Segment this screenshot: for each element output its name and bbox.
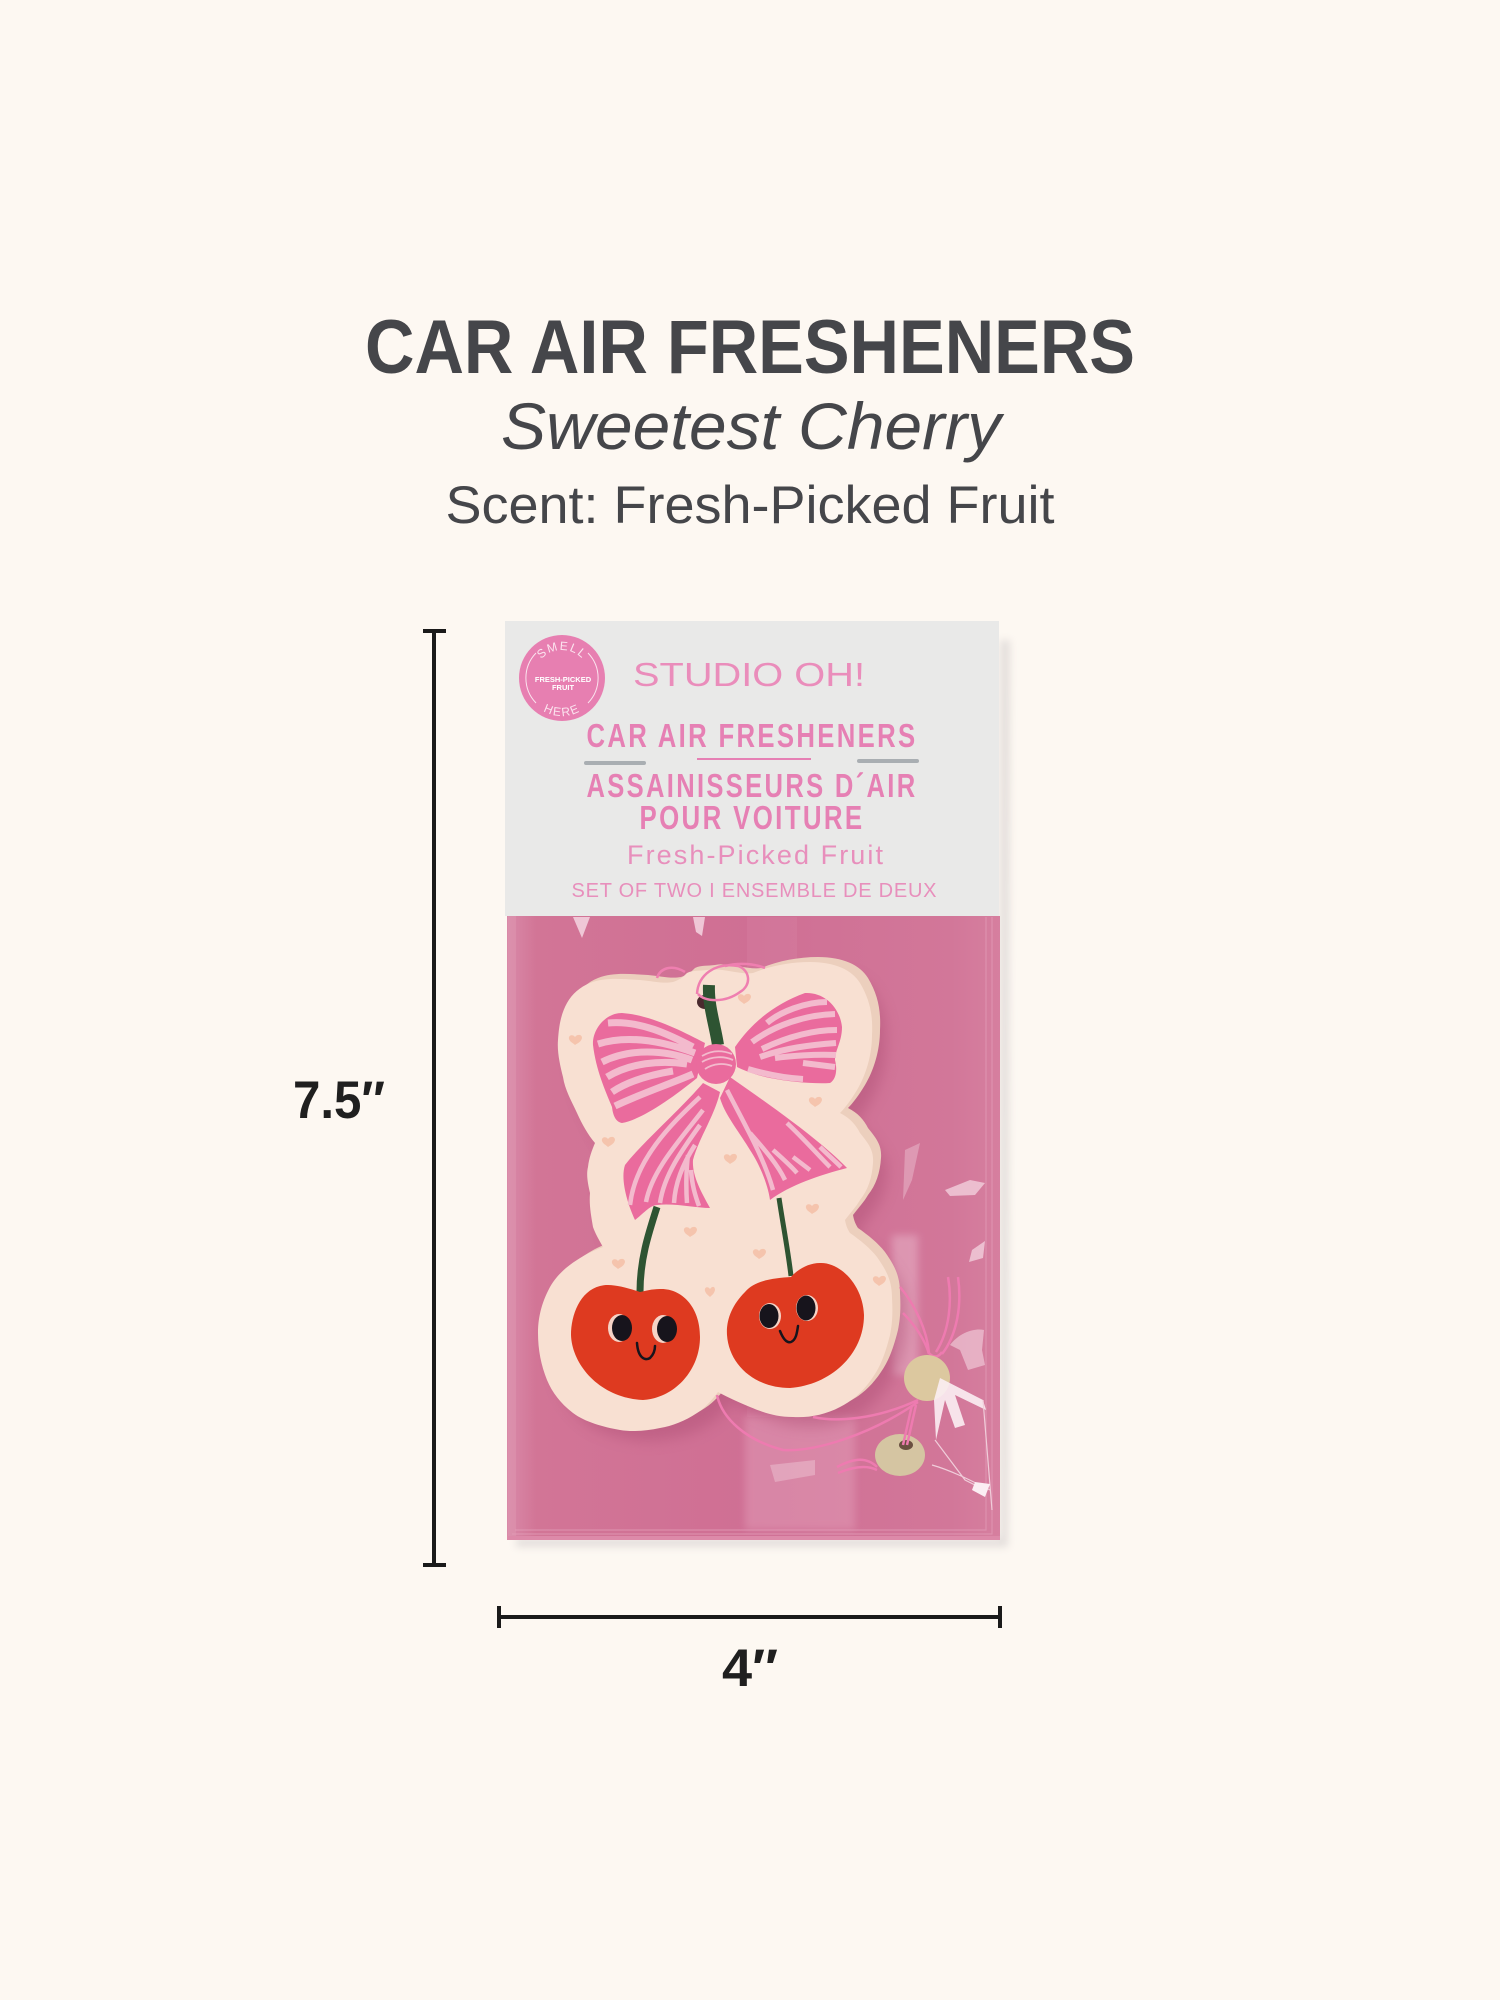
height label: 7.5″ bbox=[293, 1071, 385, 1130]
cellophane tie and glare bbox=[932, 1330, 992, 1510]
smell here badge: FRUIT bbox=[552, 683, 574, 692]
subtitle: product name: Sweetest Cherry bbox=[501, 389, 1005, 463]
divider bbox=[697, 758, 811, 760]
upper wooden bead bbox=[904, 1355, 950, 1401]
right cherry stem bbox=[779, 1198, 791, 1276]
product package bbox=[505, 621, 1012, 1549]
set of two line: SET OF TWO I ENSEMBLE DE DEUX bbox=[572, 880, 936, 902]
width label: 4″ bbox=[722, 1639, 778, 1698]
scent line: Scent: Fresh-Picked Fruit bbox=[446, 476, 1055, 535]
pink string loop at top bbox=[657, 964, 765, 1000]
scattered hearts bbox=[569, 994, 886, 1297]
package shadow bbox=[516, 640, 1010, 1547]
card background bbox=[505, 621, 999, 916]
bow bbox=[593, 993, 847, 1220]
english product name: CAR AIR FRESHENERS bbox=[586, 717, 918, 754]
scent name: Fresh-Picked Fruit bbox=[627, 840, 883, 870]
pink strings bbox=[717, 1277, 959, 1473]
top stem bbox=[709, 985, 718, 1045]
left tail bbox=[623, 1083, 720, 1220]
right staple bbox=[857, 759, 919, 763]
pink plastic bag bbox=[507, 916, 1000, 1540]
second freshener behind bbox=[546, 957, 900, 1426]
smell here badge: HERE bbox=[544, 704, 579, 716]
knot bbox=[696, 1044, 736, 1084]
right cherry bbox=[727, 1263, 864, 1388]
smell here badge bbox=[519, 635, 605, 721]
left cherry stem bbox=[640, 1207, 657, 1292]
header card bbox=[505, 621, 999, 916]
smell here badge: FRESH-PICKED bbox=[535, 675, 592, 684]
height dimension marker bbox=[423, 631, 446, 1565]
smell here badge: SMELL bbox=[537, 642, 584, 658]
title: CAR AIR FRESHENERS bbox=[365, 305, 1135, 390]
lower wooden bead bbox=[875, 1405, 925, 1476]
right tail bbox=[720, 1077, 847, 1200]
plastic glare highlights bbox=[573, 917, 985, 1482]
right wing bbox=[735, 993, 842, 1083]
left staple bbox=[584, 761, 646, 765]
freshener shadow on bag bbox=[552, 972, 906, 1441]
width dimension marker bbox=[499, 1606, 1000, 1628]
left cherry bbox=[571, 1285, 700, 1400]
french product name line two: POUR VOITURE bbox=[640, 799, 864, 836]
brand logo: STUDIO OH! bbox=[633, 656, 865, 693]
left wing bbox=[593, 1013, 705, 1123]
hanging hole bbox=[697, 995, 713, 1009]
front freshener shape bbox=[538, 962, 892, 1431]
french product name: ASSAINISSEURS D´AIR bbox=[586, 767, 918, 804]
